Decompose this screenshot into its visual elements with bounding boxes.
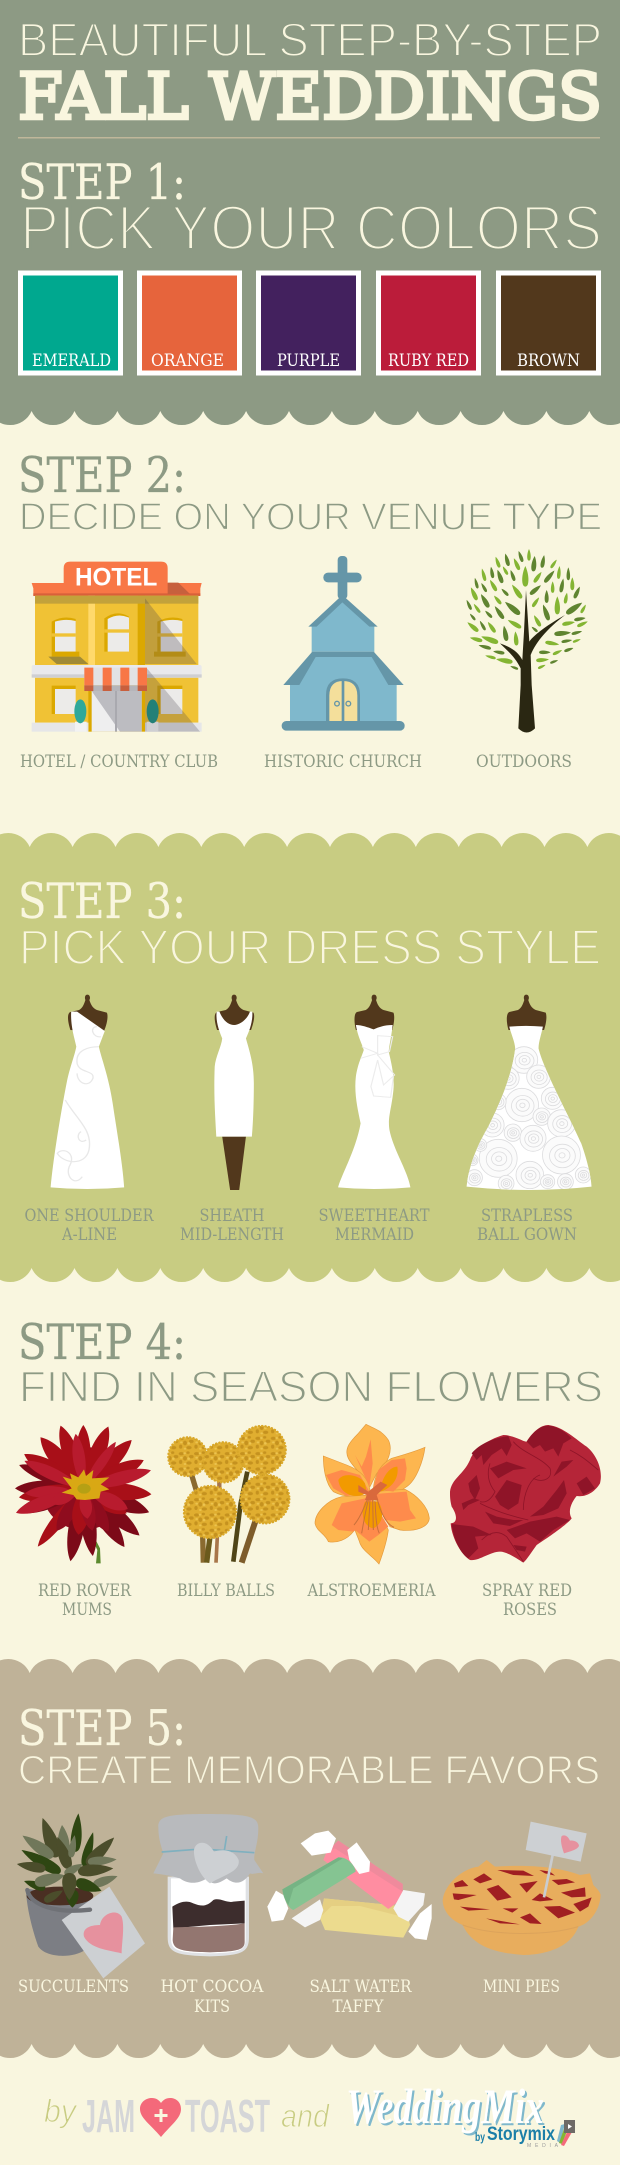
icon: tree bbox=[465, 549, 589, 732]
swatch: ruby red bbox=[378, 273, 478, 373]
heading: step 5: STEP 5: bbox=[18, 1700, 186, 1757]
dress: sweetheart mermaid bbox=[338, 995, 410, 1189]
icon: mini pie with flag bbox=[443, 1822, 601, 1955]
label: spray red roses: ROSES bbox=[503, 1600, 557, 1620]
label: one shoulder a-line: ONE SHOULDER bbox=[24, 1206, 155, 1226]
label: salt water taffy bbox=[310, 1977, 413, 2017]
label: hot cocoa kits: HOT COCOA bbox=[160, 1977, 264, 1997]
icon: billy balls bbox=[168, 1426, 289, 1563]
swatch: ruby red: RUBY RED bbox=[388, 351, 469, 371]
footer: credits bbox=[44, 2078, 575, 2149]
label: hotel / country club: HOTEL / COUNTRY CLUB bbox=[20, 752, 218, 772]
logo: weddingmix by storymix media: WeddingMix bbox=[346, 2078, 544, 2134]
logo: weddingmix by storymix media: Storymix bbox=[487, 2124, 555, 2145]
label: one shoulder a-line: A-LINE bbox=[61, 1225, 117, 1245]
icon: hotel: HOTEL bbox=[75, 564, 157, 592]
icon: hotel bbox=[32, 562, 202, 732]
credit: and: and bbox=[281, 2098, 330, 2134]
heading: step 4: STEP 4: bbox=[18, 1314, 186, 1371]
swatch: orange bbox=[140, 273, 240, 373]
label: red rover mums: RED ROVER bbox=[38, 1581, 132, 1601]
swatch: brown bbox=[498, 273, 598, 373]
logo: weddingmix by storymix media: MEDIA bbox=[527, 2143, 559, 2149]
label: historic church: HISTORIC CHURCH bbox=[264, 752, 422, 772]
title: fall weddings: FALL WEDDINGS bbox=[18, 60, 602, 134]
label: sheath mid-length: MID-LENGTH bbox=[180, 1225, 284, 1245]
subheading: find in season flowers: FIND IN SEASON FLOWERS bbox=[19, 1363, 603, 1412]
heading: step 2: STEP 2: bbox=[18, 447, 186, 504]
label: sweetheart mermaid bbox=[318, 1206, 430, 1245]
icon: spray red rose bbox=[450, 1425, 601, 1563]
logo: jam + toast bbox=[82, 2090, 270, 2142]
label: strapless ball gown: STRAPLESS bbox=[481, 1206, 573, 1226]
swatch: purple bbox=[258, 273, 358, 373]
label: hot cocoa kits bbox=[160, 1977, 264, 2017]
label: hot cocoa kits: KITS bbox=[194, 1997, 230, 2017]
panel: step 3 dress style bbox=[0, 833, 620, 1282]
swatch: brown: BROWN bbox=[517, 351, 580, 371]
heading: step 1: STEP 1: bbox=[18, 154, 186, 211]
logo: weddingmix by storymix media: by bbox=[475, 2130, 485, 2144]
label: alstroemeria: ALSTROEMERIA bbox=[307, 1581, 436, 1601]
label: mini pies: MINI PIES bbox=[483, 1977, 560, 1997]
label: spray red roses: SPRAY RED bbox=[482, 1581, 572, 1601]
icon: red rover mum bbox=[14, 1423, 153, 1563]
heading: step 3: STEP 3: bbox=[18, 873, 186, 930]
panel: step 4 flowers bbox=[0, 1284, 620, 1658]
swatch: emerald bbox=[20, 273, 120, 373]
label: billy balls: BILLY BALLS bbox=[177, 1581, 275, 1601]
label: salt water taffy: TAFFY bbox=[332, 1997, 384, 2017]
logo: jam + toast: JAM bbox=[82, 2090, 135, 2142]
icon: hot cocoa jar bbox=[153, 1814, 263, 1956]
label: sheath mid-length bbox=[180, 1206, 284, 1245]
subheading: decide on your venue type: DECIDE ON YOUR VENUE TYPE bbox=[19, 497, 602, 539]
label: sweetheart mermaid: MERMAID bbox=[335, 1225, 414, 1245]
dress: one shoulder a-line bbox=[51, 995, 124, 1189]
subheading: create memorable favors: CREATE MEMORABLE FAVORS bbox=[18, 1749, 600, 1793]
swatch: emerald: EMERALD bbox=[32, 351, 111, 371]
label: one shoulder a-line bbox=[24, 1206, 155, 1245]
dress: strapless ball gown bbox=[467, 995, 592, 1191]
label: sweetheart mermaid: SWEETHEART bbox=[318, 1206, 430, 1226]
label: red rover mums bbox=[38, 1581, 132, 1620]
panel: step 5 favors bbox=[0, 1659, 620, 2058]
label: salt water taffy: SALT WATER bbox=[310, 1977, 413, 1997]
dress: sheath mid-length bbox=[214, 995, 254, 1190]
label: succulents: SUCCULENTS bbox=[18, 1977, 129, 1997]
logo: jam + toast: TOAST bbox=[185, 2090, 270, 2142]
panel: step 2 venue type bbox=[0, 426, 620, 833]
panel: step 1 colors bbox=[0, 0, 620, 425]
label: strapless ball gown bbox=[477, 1206, 577, 1245]
credit: by: by bbox=[44, 2093, 78, 2129]
icon: alstroemeria bbox=[315, 1424, 429, 1564]
label: sheath mid-length: SHEATH bbox=[200, 1206, 264, 1226]
icon: succulent with tag bbox=[16, 1813, 145, 1978]
label: outdoors: OUTDOORS bbox=[476, 752, 572, 772]
icon: church bbox=[282, 556, 405, 731]
label: strapless ball gown: BALL GOWN bbox=[477, 1225, 577, 1245]
swatch: orange: ORANGE bbox=[151, 351, 224, 371]
title: beautiful step-by-step: BEAUTIFUL STEP-BY-STEP bbox=[18, 14, 602, 67]
swatch: purple: PURPLE bbox=[277, 351, 340, 371]
logo: weddingmix by storymix media: WeddingMix bbox=[348, 2080, 546, 2136]
label: spray red roses bbox=[482, 1581, 572, 1620]
icon: salt water taffy bbox=[267, 1831, 432, 1940]
label: red rover mums: MUMS bbox=[62, 1600, 112, 1620]
